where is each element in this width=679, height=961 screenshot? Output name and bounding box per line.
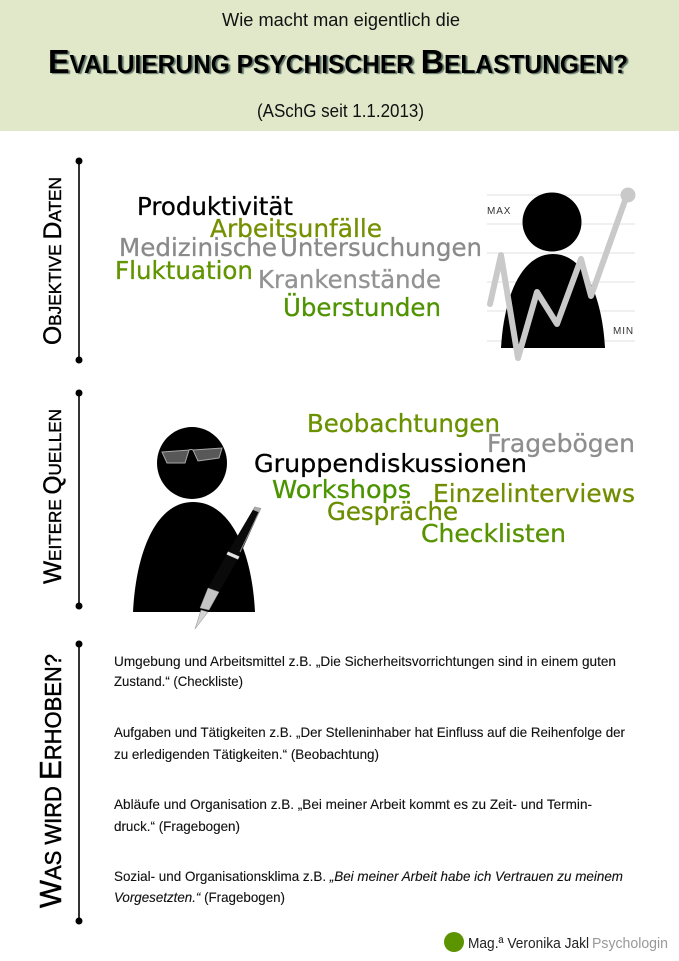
text block: Aufgaben und Tätigkeiten: Aufgaben und Tätigkeiten z.B. „Der Stelleninhaber hat Einfluss auf die Reihenfolge der xyxy=(114,724,625,740)
text block: Aufgaben und Tätigkeiten: zu erledigenden Tätigkeiten.“ (Beobachtung) xyxy=(114,746,379,762)
footer: author credit: Psychologin xyxy=(592,935,668,952)
footer: author credit xyxy=(444,932,668,952)
header legal reference: (ASchG seit 1.1.2013) xyxy=(257,101,424,121)
section heading: Objektive Daten: OBJEKTIVE DATEN xyxy=(39,177,67,345)
section heading: Weitere Quellen: WEITERE QUELLEN xyxy=(39,409,67,584)
word cloud: objective data: Produktivität xyxy=(137,192,293,221)
text block: Sozial- und Organisationsklima: Sozial- und Organisationsklima z.B. „Bei meiner Arbeit habe ich Vertrauen zu meinem xyxy=(114,868,623,884)
text block: Abläufe und Organisation xyxy=(114,796,592,834)
word cloud: further sources xyxy=(254,409,635,548)
section timeline xyxy=(76,390,82,610)
panel: header xyxy=(0,0,679,131)
word cloud: further sources: Beobachtungen xyxy=(307,409,500,438)
panel: was wird erhoben xyxy=(33,640,625,924)
chart: person with max-min line: MIN xyxy=(613,326,634,337)
word cloud: objective data: Untersuchungen xyxy=(280,233,482,262)
chart: person with max-min line: MAX xyxy=(487,206,511,217)
text block: Umgebung und Arbeitsmittel: Umgebung und Arbeitsmittel z.B. „Die Sicherheitsvorrichtungen sind in einem guten xyxy=(114,653,616,669)
chart: person with max-min line xyxy=(487,188,636,358)
word cloud: objective data: Arbeitsunfälle xyxy=(210,214,382,243)
word cloud: objective data: Medizinische xyxy=(119,233,277,262)
text block: Umgebung und Arbeitsmittel xyxy=(114,653,616,689)
text block: Sozial- und Organisationsklima xyxy=(114,868,623,905)
icon: person with sunglasses and pen xyxy=(133,427,261,629)
panel: weitere Quellen xyxy=(39,390,635,629)
footer: author credit: Mag.ª Veronika Jakl xyxy=(468,935,589,952)
header intro line: Wie macht man eigentlich die xyxy=(222,10,460,30)
text block: Aufgaben und Tätigkeiten xyxy=(114,724,625,762)
section timeline xyxy=(76,158,82,364)
word cloud: further sources: Gespräche xyxy=(327,497,458,526)
word cloud: further sources: Einzelinterviews xyxy=(433,479,635,508)
word cloud: further sources: Gruppendiskussionen xyxy=(254,449,527,478)
word cloud: further sources: Fragebögen xyxy=(487,429,635,458)
word cloud: objective data: Krankenstände xyxy=(258,265,441,294)
panel: objektive Daten xyxy=(39,158,636,364)
text block: Abläufe und Organisation: druck.“ (Fragebogen) xyxy=(114,818,240,834)
text block: Umgebung und Arbeitsmittel: Zustand.“ (Checkliste) xyxy=(114,673,243,689)
word cloud: further sources: Workshops xyxy=(272,475,411,504)
text block: Sozial- und Organisationsklima: Vorgesetzten.“ (Fragebogen) xyxy=(114,889,285,905)
word cloud: objective data xyxy=(115,192,482,322)
text block: Abläufe und Organisation: Abläufe und Organisation z.B. „Bei meiner Arbeit kommt es zu Zeit- und Termin- xyxy=(114,796,592,812)
section heading: Was wird Erhoben?: WAS WIRD ERHOBEN? xyxy=(33,654,68,908)
section timeline xyxy=(76,640,82,924)
word cloud: objective data: Überstunden xyxy=(283,293,441,322)
title: EVALUIERUNG PSYCHISCHER BELASTUNGEN? xyxy=(48,44,628,81)
word cloud: further sources: Checklisten xyxy=(421,519,566,548)
word cloud: objective data: Fluktuation xyxy=(115,256,253,285)
